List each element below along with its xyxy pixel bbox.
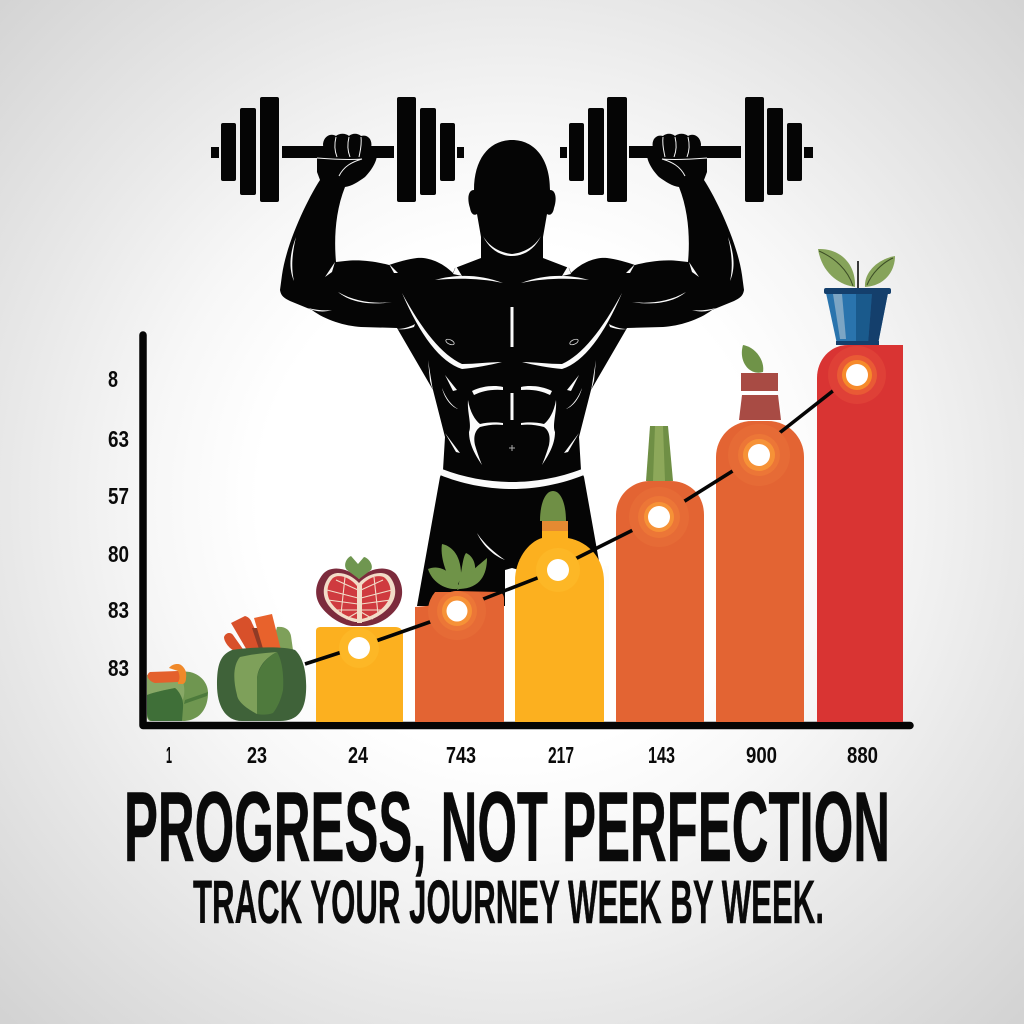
icon: pomegranate heart: [316, 556, 402, 626]
chart: x-axis labels: 23: [247, 742, 267, 768]
bar 4: orange bottle: [616, 426, 704, 722]
icon: small green vegetable with carrot: [147, 664, 208, 721]
chart: x-axis labels: 24: [348, 742, 368, 768]
chart: y-axis labels: 83: [108, 597, 129, 623]
chart: y-axis labels: [108, 366, 129, 681]
icon: right dumbbell: [560, 97, 813, 202]
chart: y-axis labels: 8: [108, 366, 118, 392]
chart: x-axis labels: 880: [847, 742, 878, 768]
bar 5: orange bottle with cap: [716, 345, 804, 722]
bar 3: yellow bottle: [515, 491, 604, 722]
chart: x-axis labels: [166, 742, 878, 768]
figure: muscular silhouette: [280, 134, 744, 610]
bar 2: orange: [415, 591, 504, 722]
icon: green vegetable with carrots: [217, 614, 306, 721]
chart: x-axis labels: 143: [648, 742, 675, 768]
icon: potted plant: [818, 249, 895, 345]
bar 6: red: [817, 345, 903, 722]
chart: y-axis labels: 57: [108, 483, 129, 509]
chart: trend line: [305, 383, 843, 664]
chart: x-axis labels: 1: [166, 742, 172, 768]
chart: x-axis labels: 217: [548, 742, 574, 768]
chart: y-axis labels: 63: [108, 426, 129, 452]
chart: axes: [143, 335, 910, 726]
chart: x-axis labels: 900: [746, 742, 777, 768]
bar 1: yellow: [316, 627, 403, 722]
chart: y-axis labels: 80: [108, 541, 129, 567]
chart: x-axis labels: 743: [446, 742, 476, 768]
chart: y-axis labels: 83: [108, 655, 129, 681]
chart: data point markers: [339, 346, 886, 668]
icon: green leaves on bar 2: [428, 544, 487, 590]
icon: left dumbbell: [211, 97, 464, 202]
